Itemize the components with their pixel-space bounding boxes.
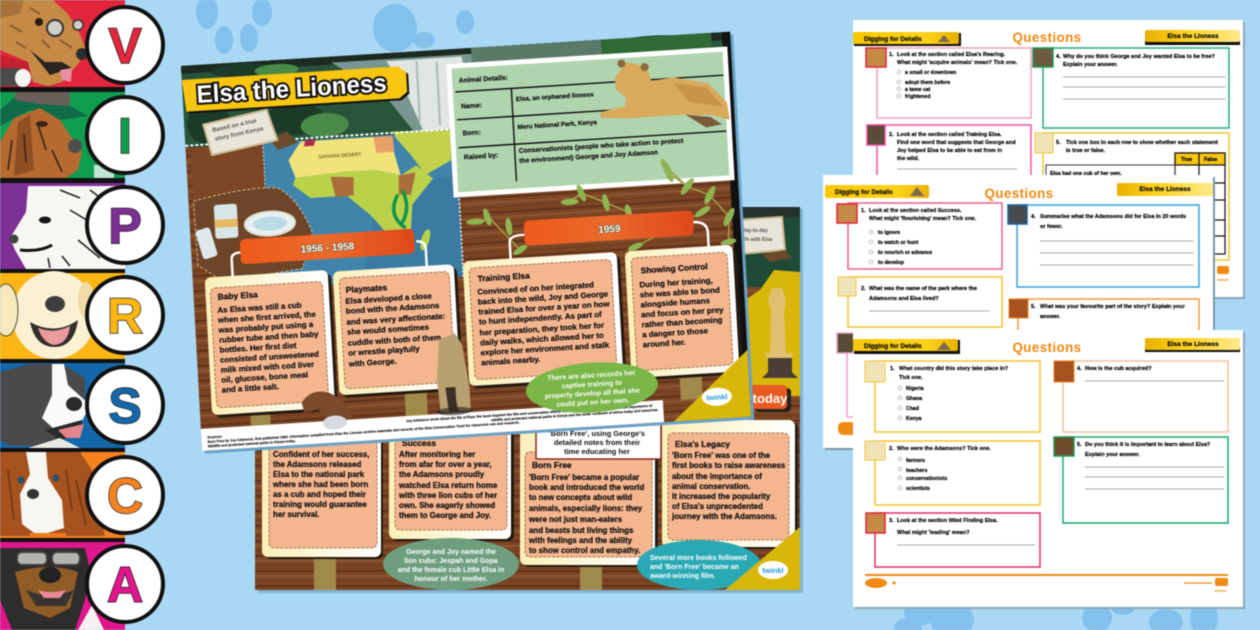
footer logo: twinkl [1217, 277, 1228, 282]
fact file table: Name: [461, 102, 482, 111]
banner: 1959 [509, 209, 709, 261]
card: Training Elsa: animals nearby. [481, 355, 540, 367]
fact file table: Born: [462, 129, 481, 137]
fact file table [449, 49, 732, 195]
plants [464, 153, 739, 263]
question 1: Look at the section called Success. [869, 208, 962, 214]
bottom sources strip: Sources: [207, 435, 222, 440]
band I: bloodhound on green [0, 92, 125, 178]
question 5 with table: Elsa had one cub of her own. [1050, 171, 1122, 177]
band V: terrier on red [0, 0, 125, 88]
question 4: 4. [1031, 214, 1036, 220]
card: Training Elsa: daily walks, which allowed her to [480, 331, 604, 347]
card: Playmates: she would sometimes [347, 323, 430, 337]
card: Playmates: or wrestle playfully [348, 344, 421, 358]
header right [1145, 30, 1240, 45]
question 1: a small or downtown [905, 70, 956, 76]
card: success: with three lion cubs of her [398, 491, 497, 500]
forest header piece [735, 207, 800, 287]
banner: today [750, 385, 791, 412]
card: success: them to George and Joy. [399, 511, 491, 520]
question 1: Tick one. [899, 375, 923, 381]
question 1: Look at the section called Elsa's Rearing. [897, 52, 1005, 58]
card: success: the Adamsons proudly [399, 470, 485, 479]
card: Born Free: to show control and empathy. [529, 546, 640, 555]
title: Questions [1012, 30, 1082, 45]
banner: 1956 - 1958 [231, 228, 427, 279]
corner triangle with twinkl logo: twinkl [706, 392, 728, 402]
question 5: What was your favourite part of the story? Explain your [1040, 304, 1186, 310]
question 2: What was the name of the park where the [869, 286, 977, 292]
title banner: Elsa the Lioness [196, 69, 387, 109]
question 2 [838, 277, 1002, 327]
footer logo [838, 422, 858, 435]
callout: green oval: could put on her own. [556, 397, 629, 409]
card: release [262, 423, 383, 559]
card: Showing Control: around her. [643, 338, 686, 349]
divider [0, 538, 125, 542]
fact file table: the environment) George and Joy Adamson [519, 149, 658, 165]
posts [314, 555, 602, 590]
banner: 1959: 1959 [598, 224, 621, 236]
question 3: Look at the section titled Finding Elsa. [897, 518, 998, 524]
note card: based on a true story: Based on a true [212, 118, 258, 134]
header right [1117, 183, 1213, 196]
question 1: frightened [905, 94, 930, 100]
question 5 [1009, 299, 1199, 359]
band R: golden retriever on yellow [0, 271, 125, 359]
banner: today: today [753, 391, 788, 406]
footer rule and logos: twinkl [1215, 588, 1226, 593]
question 5: 5. [1031, 304, 1036, 310]
question 1 [866, 48, 1031, 118]
card: Playmates: with George. [348, 357, 397, 369]
question 5 with table: is true or false. [1066, 148, 1106, 154]
card: release: as a cub and hoped their [273, 490, 366, 499]
card: Born Free: with feelings and the ability [528, 536, 633, 545]
question 1: Chad [906, 406, 919, 412]
bottom sources strip: Born Free by Joy Adamson, first published 1960. Information compiled from Elsa the Lioness archive materials and records of the Elsa Conservation Trust for classroom use and research. [207, 421, 520, 444]
letter circle P: P [108, 198, 142, 254]
header left: Digging for Details [835, 189, 893, 196]
question 1: to watch or hunt [878, 240, 919, 246]
question 4: 4. [1056, 54, 1061, 60]
card: Playmates: Playmates [345, 282, 388, 295]
header left [853, 339, 960, 354]
callout: grey-green oval: George and Joy named the [406, 549, 496, 556]
letter circle I [87, 97, 163, 173]
card: Showing Control: Showing Control [640, 261, 708, 275]
card: Playmates: bond with the Adamsons [346, 301, 440, 316]
question 5: Explain your answer. [1085, 452, 1140, 458]
card: Baby Elsa: was probably put using a [217, 320, 314, 335]
question 1: What country did this story take place in? [899, 366, 1009, 372]
question 4: Summarise what the Adamsons did for Elsa in 20 words [1040, 214, 1186, 220]
corner triangle with twinkl logo: twinkl [762, 566, 784, 575]
note card: based on a true story [203, 108, 298, 156]
letter circle R: R [107, 288, 143, 344]
callout: teal oval: award-winning film. [650, 573, 715, 580]
card: Born Free: book and introduced the world [529, 483, 644, 492]
note card: based on a true story: story from Kenya [214, 126, 265, 143]
card: Playmates: and was very affectionate: [346, 312, 445, 327]
question 1: 1. [890, 366, 895, 372]
question 3 [837, 333, 1002, 417]
fact file table: Meru National Park, Kenya [517, 119, 598, 131]
card: Elsa's Legacy: first books to raise awareness [672, 461, 786, 470]
forest and waterfall header [181, 31, 751, 451]
footer logo [1217, 266, 1229, 282]
card: Showing Control [625, 244, 744, 381]
card: release: her survival. [273, 510, 320, 519]
letter circle V [87, 7, 163, 83]
question 1: to ignore [878, 230, 900, 236]
question 2: Adamsons and Elsa lived? [869, 296, 939, 302]
forest header piece: life with Elsa [742, 237, 773, 243]
question 1: 1. [889, 52, 894, 58]
card: Training Elsa: Convinced of on her integrated [477, 280, 594, 297]
question 5 with table: False [1204, 157, 1217, 163]
card: release: where she had been born [272, 480, 368, 489]
letter circle C: C [107, 468, 143, 524]
corner triangle with twinkl logo [670, 350, 751, 421]
card: Born Free: to new concepts about wild [529, 493, 632, 502]
yellow blob [745, 270, 800, 396]
question 2: Find one word that suggests that George and [897, 140, 1016, 146]
question 4 [1008, 205, 1199, 287]
question 1: adopt them before [905, 80, 950, 86]
question 1 [837, 203, 1002, 269]
card: Elsa's Legacy: animal conservation. [672, 482, 750, 491]
panel: back poster page [255, 207, 803, 593]
card: Elsa's Legacy: journey with the Adamsons. [671, 512, 777, 521]
card: Playmates: cuddle with both of them [347, 333, 441, 348]
card: release: Confident of her success, [273, 450, 369, 459]
map of Africa [185, 128, 466, 295]
fact file table: Conservationists (people who take action to protect [519, 138, 684, 155]
wood side block [191, 144, 266, 208]
posts [249, 369, 703, 427]
header right: Elsa the Lioness [1167, 341, 1219, 348]
callout: grey-green oval: and the female cub Little Elsa in [398, 567, 504, 574]
bottom sources strip: Wildlife and protected national parks in Kenya today. [208, 439, 296, 448]
question 1: What might 'acquire animals' mean? Tick one. [897, 60, 1018, 66]
callout: green oval: There are also records her [547, 370, 636, 382]
question 2: Joy helped Elsa to be able to eat from in [897, 148, 1003, 154]
card: Training Elsa: her preparation, they took her for [479, 321, 604, 337]
icon: Oscar statue [762, 288, 798, 378]
card: success: Success [402, 438, 436, 448]
title: Questions [984, 186, 1054, 201]
card: Showing Control: and focus on her prey [641, 305, 724, 319]
card: Baby Elsa: and a little salt. [222, 382, 279, 395]
question 2: farmers [906, 458, 925, 464]
callout: green oval [525, 359, 659, 417]
card: Baby Elsa: As Elsa was still a cub [217, 301, 302, 315]
question 1: to nourish or advance [878, 250, 932, 256]
panel: front poster page [181, 31, 754, 454]
letter circle V: V [108, 18, 142, 74]
card: Playmates [333, 264, 464, 398]
card: Training Elsa: back into the wild, Joy and George [478, 289, 609, 307]
divider [0, 178, 125, 183]
question 5: answer. [1040, 314, 1061, 320]
question 1: What might 'flourishing' mean? Tick one. [869, 216, 976, 222]
card: Baby Elsa: Baby Elsa [217, 289, 258, 302]
question 3: What might 'leading' mean? [897, 530, 970, 536]
banner: 1956 - 1958: 1956 - 1958 [300, 241, 355, 256]
callout: grey-green oval: honour of her mother. [415, 576, 487, 583]
question 5 with table: 5. [1056, 140, 1061, 146]
question 5: 5. [1077, 442, 1082, 448]
card: Training Elsa: to hunt independently. As part of [479, 310, 602, 327]
header right: Elsa the Lioness [1139, 186, 1191, 193]
callout: green oval: properly develop all that she [545, 388, 640, 400]
question 2: conservationists [906, 476, 947, 482]
card: Baby Elsa: rubber tube and then baby [219, 330, 319, 345]
card: Playmates: Elsa developed a close [345, 291, 433, 306]
card: Showing Control: a danger to those [642, 326, 709, 339]
card: Baby Elsa [205, 270, 338, 418]
card: Elsa's Legacy: of Elsa's unprecedented [672, 502, 763, 511]
callout: grey-green oval [383, 538, 519, 590]
card: success: from afar for over a year, [399, 460, 492, 469]
icon: lying lioness [597, 53, 730, 134]
callout: notes box [536, 415, 661, 459]
letter circle S [87, 367, 163, 443]
band A: rottweiler on pink [0, 542, 125, 630]
card: release: the Adamsons released [273, 460, 361, 469]
letter circle A: A [107, 557, 143, 613]
callout: notes box: 'Born Free', using George's [549, 429, 645, 438]
header left: Digging for Details [864, 36, 922, 43]
fact file table: Raised by: [464, 152, 499, 161]
bottom sources strip: wildlife and protected national parks in Kenya and the wider continent of Africa today and tomorrow. [490, 408, 658, 422]
divider [0, 359, 125, 363]
divider [0, 448, 125, 452]
question 2: Who were the Adamsons? Tick one. [897, 446, 991, 452]
question 3: 3. [889, 518, 894, 524]
footer rule and logos [865, 574, 1228, 593]
card: Showing Control: rather than becoming [641, 315, 723, 329]
letter circle S: S [108, 378, 142, 434]
question 2: the wild. [897, 156, 919, 162]
card: Born Free [520, 423, 658, 567]
question 2: 2. [889, 132, 894, 138]
question 2: 2. [861, 286, 866, 292]
card: Training Elsa [463, 252, 627, 389]
card: Born Free: 'Born Free' became a popular [529, 473, 639, 482]
card: Baby Elsa: bottles. Her first diet [219, 341, 297, 355]
card: release: Elsa to the national park [273, 470, 365, 479]
question 5 with table: Tick one box in each row to show whether each statement [1066, 140, 1218, 146]
card: Training Elsa: explore her environment and stalk [480, 340, 610, 357]
panel: worksheet page 1 [853, 20, 1245, 299]
icon: standing lion cub [432, 332, 473, 416]
card: Baby Elsa: consisted of unsweetened [220, 350, 319, 365]
question 1: Ghana [906, 396, 922, 402]
card: Training Elsa: Training Elsa [477, 270, 530, 284]
question 1: to develop [878, 260, 904, 266]
card: Elsa's Legacy: about the importance of [672, 472, 762, 481]
callout: teal oval: and 'Born Free' became an [650, 564, 739, 571]
question 4 [1033, 48, 1229, 128]
panel: VIPERS dog strip [0, 0, 163, 630]
card: Elsa's Legacy [662, 420, 798, 549]
card: Born Free: and beasts but living things [529, 526, 634, 535]
callout: teal oval [637, 540, 761, 590]
letter circle R [87, 277, 163, 353]
question 2: 2. [889, 446, 894, 452]
divider [0, 269, 125, 273]
card: Training Elsa: trained Elsa for over a year on how [478, 299, 611, 317]
question 1: Nigeria [906, 386, 924, 392]
header left [853, 32, 961, 46]
question 1 [865, 361, 1040, 432]
card: Born Free: animals, especially lions: they [529, 504, 643, 513]
icon: small otter and stone [301, 390, 353, 432]
card: success: After monitoring her [399, 450, 475, 459]
question 1: a tame cat [905, 87, 931, 93]
question 3 [866, 513, 1040, 567]
card: success [389, 423, 514, 541]
question 5 with table [1035, 133, 1229, 260]
question 4: Why do you think George and Joy wanted Elsa to be free? [1063, 54, 1216, 60]
question 4: or fewer. [1040, 224, 1063, 230]
callout: teal oval: Several more books followed [650, 555, 747, 562]
panel: worksheet page 3 [853, 330, 1245, 609]
card: success: watched Elsa return home [398, 481, 498, 490]
question 2: Look at the section called Training Elsa. [897, 132, 1002, 138]
question 2: scientists [906, 486, 930, 492]
map of Africa: SAHARA DESERT [318, 152, 361, 160]
callout: grey-green oval: lion cubs: Jespah and Gopa [404, 558, 498, 565]
bottom sources strip: Joy Adamson wrote about the life of Elsa; the book inspired the film and conservation efforts worldwide, raising awareness about the importance of [406, 404, 653, 423]
card: Baby Elsa: when she first arrived, the [217, 310, 317, 325]
question 4: 4. [1077, 366, 1082, 372]
band P: white dog on purple [0, 183, 125, 269]
question 5 with table: True [1181, 157, 1192, 163]
fact file table: Animal Details: [459, 75, 508, 85]
question 2: teachers [906, 468, 927, 474]
card: Born Free: Born Free [532, 460, 572, 470]
question 1: 1. [861, 208, 866, 214]
question 4: How is the cub acquired? [1085, 366, 1152, 372]
card: Showing Control: During her training, [639, 276, 713, 290]
band S: collie on blue [0, 363, 125, 448]
header right: Elsa the Lioness [1167, 33, 1219, 40]
callout: green oval: captive training to [561, 380, 622, 390]
corner triangle with twinkl logo [725, 527, 800, 590]
forest header piece: Day-to-day [742, 228, 768, 234]
question 5: Do you think it is important to learn about Elsa? [1085, 442, 1211, 448]
callout: notes box: time educating her [564, 447, 630, 456]
letter circle I: I [118, 108, 132, 164]
card: Born Free: were not just man-eaters [528, 515, 623, 524]
card: Elsa's Legacy: It increased the popularity [672, 492, 771, 501]
card: Showing Control: alongside humans [640, 296, 711, 309]
callout: notes box: detailed notes from their [554, 438, 640, 447]
letter circle P [87, 187, 163, 263]
question 2 [865, 441, 1040, 505]
letter circle C [87, 457, 163, 533]
card: Baby Elsa: oil, glucose, bone meal [221, 370, 308, 385]
question 5 [1054, 437, 1228, 523]
panel: worksheet page 2 [823, 175, 1215, 450]
question 4 [1054, 361, 1228, 432]
table objects: glass, plate, bottle [193, 185, 315, 283]
header left: Digging for Details [864, 343, 922, 350]
fact file table: Elsa, an orphaned lioness [516, 91, 594, 103]
header left [825, 185, 929, 198]
divider [0, 87, 125, 92]
question 2 [867, 125, 1031, 185]
card: release: training would guarantee [273, 500, 367, 509]
question 4: Explain your answer. [1063, 62, 1118, 68]
title: Questions [1012, 340, 1082, 355]
bottom sources strip [201, 400, 664, 451]
band C: spaniel on orange [0, 452, 125, 538]
card: Baby Elsa: milk mixed with cod liver [220, 360, 314, 375]
card: Showing Control: she was able to bond [640, 286, 720, 299]
card: Elsa's Legacy: Elsa's Legacy [675, 439, 730, 449]
card: success: own. She eagerly showed [399, 501, 495, 510]
letter circle A [87, 546, 163, 622]
question 1: Kenya [906, 416, 922, 422]
card: Elsa's Legacy: 'Born Free' was one of the [672, 451, 771, 460]
header right [1145, 338, 1240, 352]
